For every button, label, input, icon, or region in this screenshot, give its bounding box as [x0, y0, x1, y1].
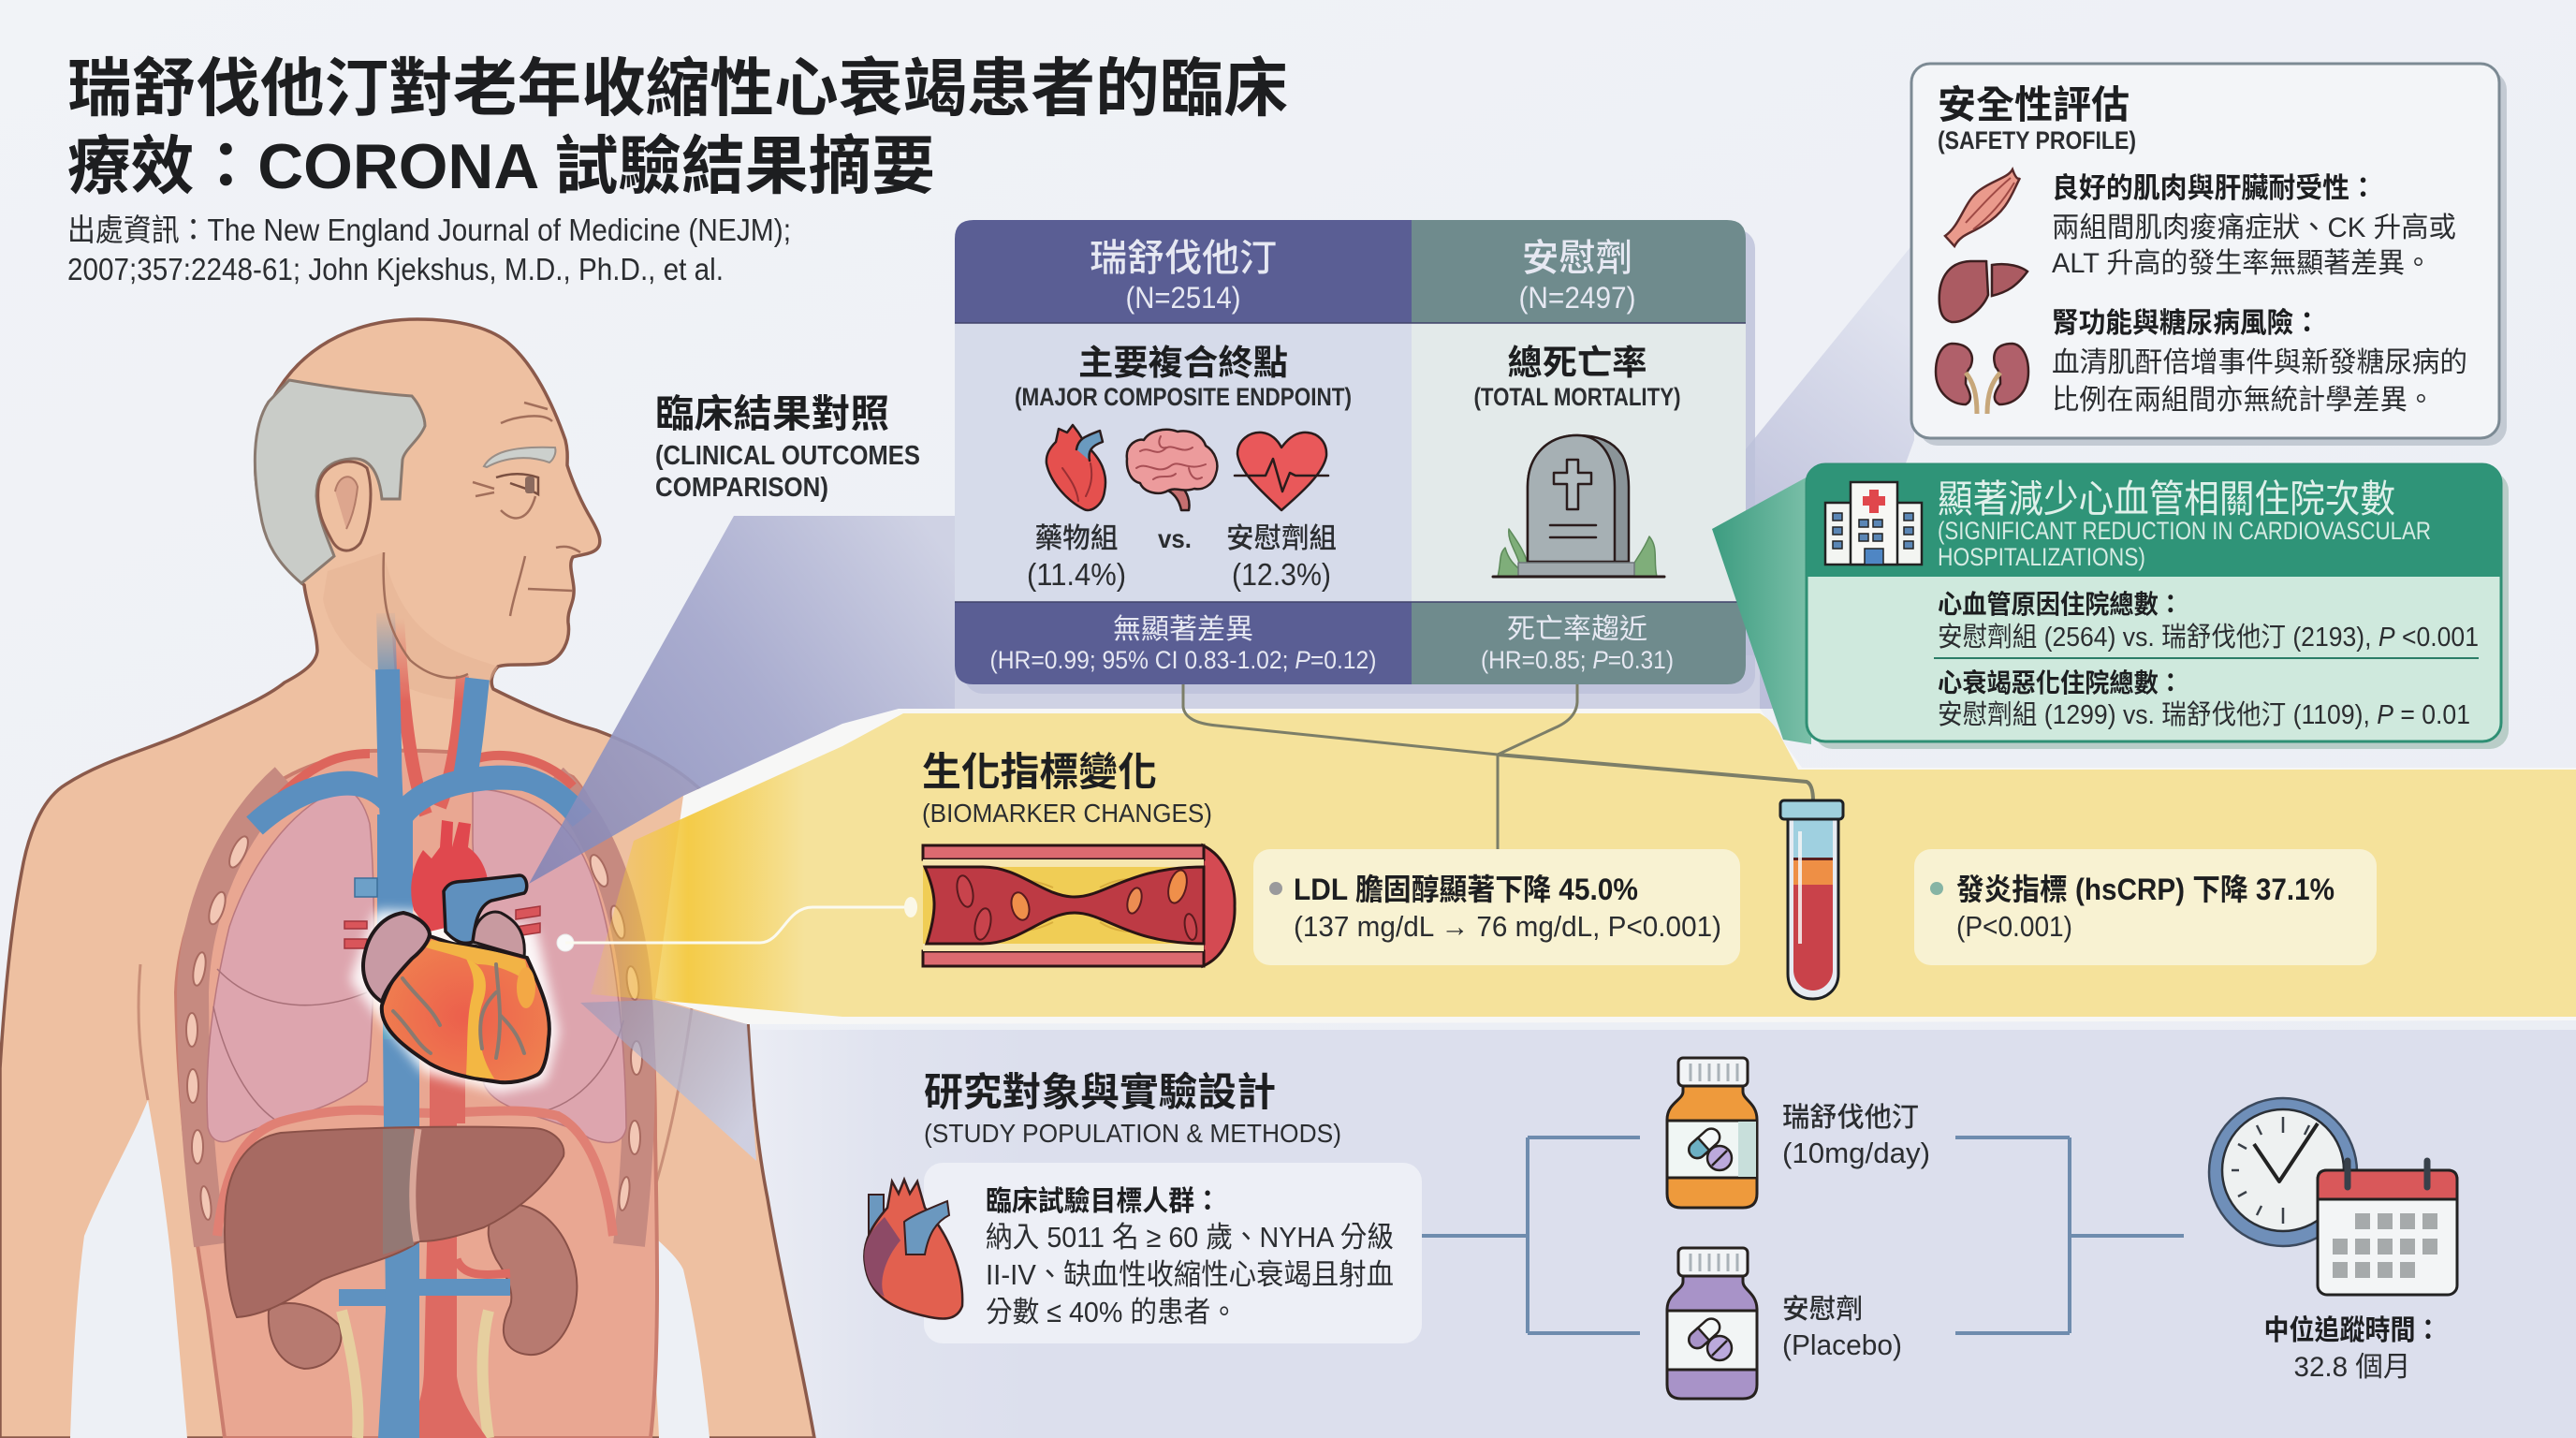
- safety heading: [1938, 83, 2136, 154]
- footer: composite result: 無顯著差異: [1113, 614, 1253, 645]
- heart failure hospitalizations: 心衰竭惡化住院總數：: [1938, 668, 2183, 697]
- icon: pulse heart: [1235, 433, 1328, 510]
- chest and abdomen cavity: [176, 751, 657, 1438]
- table text: rosuvastatin header: (N=2514): [1125, 281, 1241, 315]
- callout tip: [904, 897, 917, 917]
- red vessel stubs: [344, 906, 540, 948]
- inner ear: [335, 477, 358, 529]
- cardiovascular hospitalizations: 心血管原因住院總數：: [1938, 590, 2183, 619]
- LDL text: [1294, 873, 1721, 943]
- coronary fat band top: [426, 940, 530, 983]
- callout dot: [557, 934, 574, 951]
- right body: [1412, 323, 1746, 602]
- green wedge to hospital card: [1712, 475, 1811, 744]
- lower red aorta: [398, 1030, 487, 1438]
- panel: outcomes table: [955, 220, 1755, 694]
- population text: [986, 1186, 1394, 1328]
- hsCRP text: [1956, 873, 2334, 943]
- icon: muscle: [1945, 169, 2020, 246]
- right header: [1412, 220, 1746, 323]
- clinical outcomes heading: 臨床結果對照: [655, 392, 889, 435]
- card shadow: [1814, 472, 2509, 749]
- footer: composite result: (HR=0.99; 95% CI 0.83-1.02; P=0.12): [990, 646, 1376, 674]
- muscle and liver tolerance text: 良好的肌肉與肝臟耐受性：: [2052, 173, 2377, 204]
- source citation: 2007;357:2248-61; John Kjekshus, M.D., Ph.D., et al.: [67, 252, 724, 286]
- icon: placebo bottle: [1667, 1248, 1757, 1399]
- panel: study population and methods: [864, 1058, 2457, 1399]
- small vessel stubs: [355, 878, 377, 897]
- purple wedge from heart to table: [529, 516, 964, 884]
- lower grey wedge from heart: [580, 1000, 756, 1161]
- icon: calendar: [2318, 1161, 2457, 1295]
- safety heading: (SAFETY PROFILE): [1938, 126, 2136, 154]
- iris: [525, 477, 534, 493]
- kidney and diabetes risk text: 腎功能與糖尿病風險：: [2052, 308, 2320, 339]
- head details: [255, 380, 580, 678]
- hsCRP text: 發炎指標 (hsCRP) 下降 37.1%: [1956, 873, 2334, 906]
- icon: liver: [1939, 261, 2027, 322]
- pulmonary artery: [444, 875, 527, 943]
- kidney and diabetes risk text: 血清肌酐倍增事件與新發糖尿病的: [2052, 347, 2467, 378]
- left header: [955, 220, 1412, 323]
- table text: placebo header: (N=2497): [1518, 281, 1636, 315]
- heart failure hospitalizations: [1938, 668, 2470, 730]
- icon: rosuvastatin bottle: [1667, 1058, 1757, 1208]
- liver: [225, 1127, 564, 1317]
- icon: population heart: [864, 1180, 962, 1319]
- icon: brain: [1127, 430, 1217, 510]
- source citation: 出處資訊：The New England Journal of Medicine (NEJM);: [67, 213, 791, 247]
- population text: 納入 5011 名 ≥ 60 歲、NYHA 分級: [986, 1221, 1394, 1254]
- study heading: 研究對象與實驗設計: [924, 1070, 1276, 1114]
- clinical outcomes heading: COMPARISON): [655, 473, 828, 503]
- white strips around bands: [655, 709, 2576, 1024]
- arteries: [398, 618, 462, 814]
- population text: 臨床試驗目標人群：: [986, 1186, 1221, 1217]
- left atrium: [363, 913, 430, 1002]
- kidney and diabetes risk text: 比例在兩組間亦無統計學差異。: [2052, 385, 2435, 416]
- title: 療效：CORONA 試驗結果摘要: [67, 131, 935, 202]
- lavender wedge between table and safety card: [1741, 242, 1914, 709]
- left body: [955, 323, 1412, 602]
- rosuvastatin dose label: (10mg/day): [1782, 1137, 1930, 1169]
- coronary fat patch right: [517, 967, 535, 1008]
- hsCRP text: (P<0.001): [1956, 910, 2072, 943]
- icon: artery with plaque: [923, 845, 1235, 966]
- rules: [955, 323, 1746, 602]
- coronary fat band centre: [466, 959, 494, 1078]
- table text: placebo header: 安慰劑: [1522, 238, 1632, 279]
- heart failure hospitalizations: 安慰劑組 (1299) vs. 瑞舒伐他汀 (1109), P = 0.01: [1938, 699, 2470, 730]
- footer: mortality result: [1481, 614, 1674, 674]
- yellow biomarker band: [591, 713, 2576, 1017]
- panel: biomarker changes: [922, 750, 2377, 999]
- liver ligament: [413, 1129, 418, 1241]
- rosuvastatin dose label: [1782, 1102, 1930, 1169]
- footer: mortality result: (HR=0.85; P=0.31): [1481, 646, 1674, 674]
- source citation: [67, 213, 791, 286]
- median follow-up text: 32.8 個月: [2293, 1352, 2411, 1383]
- face lines: [384, 403, 580, 678]
- icon: clock: [2209, 1098, 2357, 1246]
- hospitalization heading: 顯著減少心血管相關住院次數: [1938, 477, 2395, 521]
- rib band left: [193, 779, 285, 1245]
- card shadow: [1919, 71, 2507, 446]
- hsCRP box: [1914, 849, 2377, 965]
- arm gap left: [70, 1100, 187, 1438]
- card body: [1807, 464, 2501, 741]
- table shadow: [964, 229, 1755, 694]
- eye: [496, 474, 538, 494]
- right atrium: [473, 912, 524, 957]
- major composite endpoint heading: [1015, 344, 1352, 411]
- muscle and liver tolerance text: 兩組間肌肉痠痛症狀、CK 升高或: [2052, 213, 2456, 243]
- lung fissures: [213, 969, 623, 1123]
- ureters: [342, 1311, 489, 1438]
- target population box: [924, 1163, 1422, 1343]
- cardiovascular hospitalizations: [1938, 590, 2479, 653]
- placebo label: (Placebo): [1782, 1328, 1902, 1361]
- icon: blood test tube: [1780, 800, 1843, 999]
- hospitalization heading: HOSPITALIZATIONS): [1938, 543, 2145, 571]
- LDL bullet: [1269, 882, 1282, 895]
- clinical outcomes heading: [655, 392, 920, 503]
- LDL box: [1253, 849, 1740, 965]
- footer: composite result: [990, 614, 1376, 674]
- study section background band: [730, 1030, 2576, 1438]
- group labels and rates: (11.4%): [1027, 557, 1126, 592]
- right footer: [1412, 602, 1746, 684]
- right lung: [473, 788, 626, 1142]
- biomarker heading: (BIOMARKER CHANGES): [922, 799, 1212, 828]
- clinical outcomes heading: (CLINICAL OUTCOMES: [655, 441, 920, 471]
- body silhouette: [0, 319, 814, 1438]
- veins: [386, 613, 388, 674]
- eyebrow: [484, 448, 555, 467]
- left lung: [207, 788, 373, 1142]
- group labels and rates: vs.: [1158, 524, 1192, 553]
- ribs: [186, 834, 642, 1221]
- left footer: [955, 602, 1412, 684]
- table text: placebo header: [1518, 238, 1636, 315]
- heart illustration: [344, 820, 549, 1082]
- icon: hospital: [1825, 482, 1922, 565]
- hsCRP bullet: [1930, 882, 1943, 895]
- study heading: [924, 1070, 1341, 1148]
- connector lines from table to biomarkers: [1183, 684, 1813, 849]
- ventricle: [382, 936, 549, 1082]
- card header: [1807, 464, 2501, 577]
- kidney right: [489, 1205, 577, 1355]
- cardiovascular hospitalizations: 安慰劑組 (2564) vs. 瑞舒伐他汀 (2193), P <0.001: [1938, 622, 2479, 653]
- ear: [318, 462, 371, 550]
- lower blue vena cava: [378, 1030, 419, 1438]
- upper veins and arteries: [255, 613, 582, 1039]
- panel: safety profile: [1911, 64, 2507, 446]
- arm gap right: [642, 1226, 710, 1438]
- callout line from heart to biomarker band: [557, 897, 917, 951]
- rosuvastatin dose label: 瑞舒伐他汀: [1782, 1102, 1919, 1133]
- table text: rosuvastatin header: 瑞舒伐他汀: [1090, 238, 1277, 279]
- liver overlay of vena cava: [383, 1129, 414, 1255]
- population text: 分數 ≤ 40% 的患者。: [986, 1296, 1237, 1328]
- card: [1911, 64, 2499, 438]
- biomarker heading: 生化指標變化: [922, 750, 1157, 794]
- icon: heart: [1046, 425, 1105, 510]
- arm shading: [139, 964, 693, 1226]
- diaphragm: [217, 1110, 613, 1236]
- randomization tree lines: [1422, 1137, 2184, 1333]
- total mortality heading: 總死亡率: [1507, 344, 1647, 382]
- group labels and rates: 藥物組: [1035, 523, 1118, 554]
- biomarker heading: [922, 750, 1212, 828]
- panel: hospitalization reduction: [1807, 464, 2509, 749]
- group labels and rates: (12.3%): [1232, 557, 1331, 592]
- icon: gravestone: [1493, 435, 1664, 577]
- kidney and diabetes risk text: [2052, 308, 2467, 416]
- LDL text: (137 mg/dL → 76 mg/dL, P<0.001): [1294, 910, 1721, 943]
- study heading: (STUDY POPULATION & METHODS): [924, 1119, 1341, 1148]
- neck shadow: [323, 552, 498, 699]
- table text: rosuvastatin header: [1090, 238, 1277, 315]
- title: [67, 53, 1288, 202]
- red renal artery: [457, 1259, 510, 1274]
- placebo label: [1782, 1294, 1902, 1361]
- renal veins: [339, 1287, 510, 1298]
- hair: [255, 380, 425, 583]
- icon: kidneys: [1936, 344, 2028, 414]
- kidney left: [269, 1303, 341, 1369]
- hospitalization heading: (SIGNIFICANT REDUCTION IN CARDIOVASCULAR: [1938, 517, 2431, 545]
- major composite endpoint heading: 主要複合終點: [1078, 344, 1288, 382]
- safety heading: 安全性評估: [1938, 83, 2130, 126]
- group labels and rates: 安慰劑組: [1226, 523, 1337, 554]
- placebo label: 安慰劑: [1782, 1294, 1863, 1325]
- population text: II-IV、缺血性收縮性心衰竭且射血: [986, 1258, 1394, 1291]
- total mortality heading: [1473, 344, 1681, 411]
- footer: mortality result: 死亡率趨近: [1507, 614, 1647, 645]
- lavender strip under table: [955, 655, 1760, 709]
- major composite endpoint heading: (MAJOR COMPOSITE ENDPOINT): [1015, 383, 1352, 411]
- median follow-up text: [2263, 1314, 2441, 1383]
- heart glow: [361, 920, 549, 1082]
- muscle and liver tolerance text: [2052, 173, 2456, 279]
- group labels and rates: [1027, 523, 1337, 592]
- title: 瑞舒伐他汀對老年收縮性心衰竭患者的臨床: [67, 53, 1288, 125]
- aorta with branches: [411, 820, 489, 932]
- total mortality heading: (TOTAL MORTALITY): [1473, 383, 1681, 411]
- coronary vessels: [393, 964, 524, 1058]
- LDL text: LDL 膽固醇顯著下降 45.0%: [1294, 873, 1638, 906]
- human anatomy figure: [0, 319, 814, 1438]
- hospitalization heading: [1938, 477, 2431, 571]
- median follow-up text: 中位追蹤時間：: [2263, 1314, 2441, 1346]
- rib band right: [552, 779, 639, 1245]
- muscle and liver tolerance text: ALT 升高的發生率無顯著差異。: [2052, 248, 2432, 279]
- callout line: [565, 907, 906, 943]
